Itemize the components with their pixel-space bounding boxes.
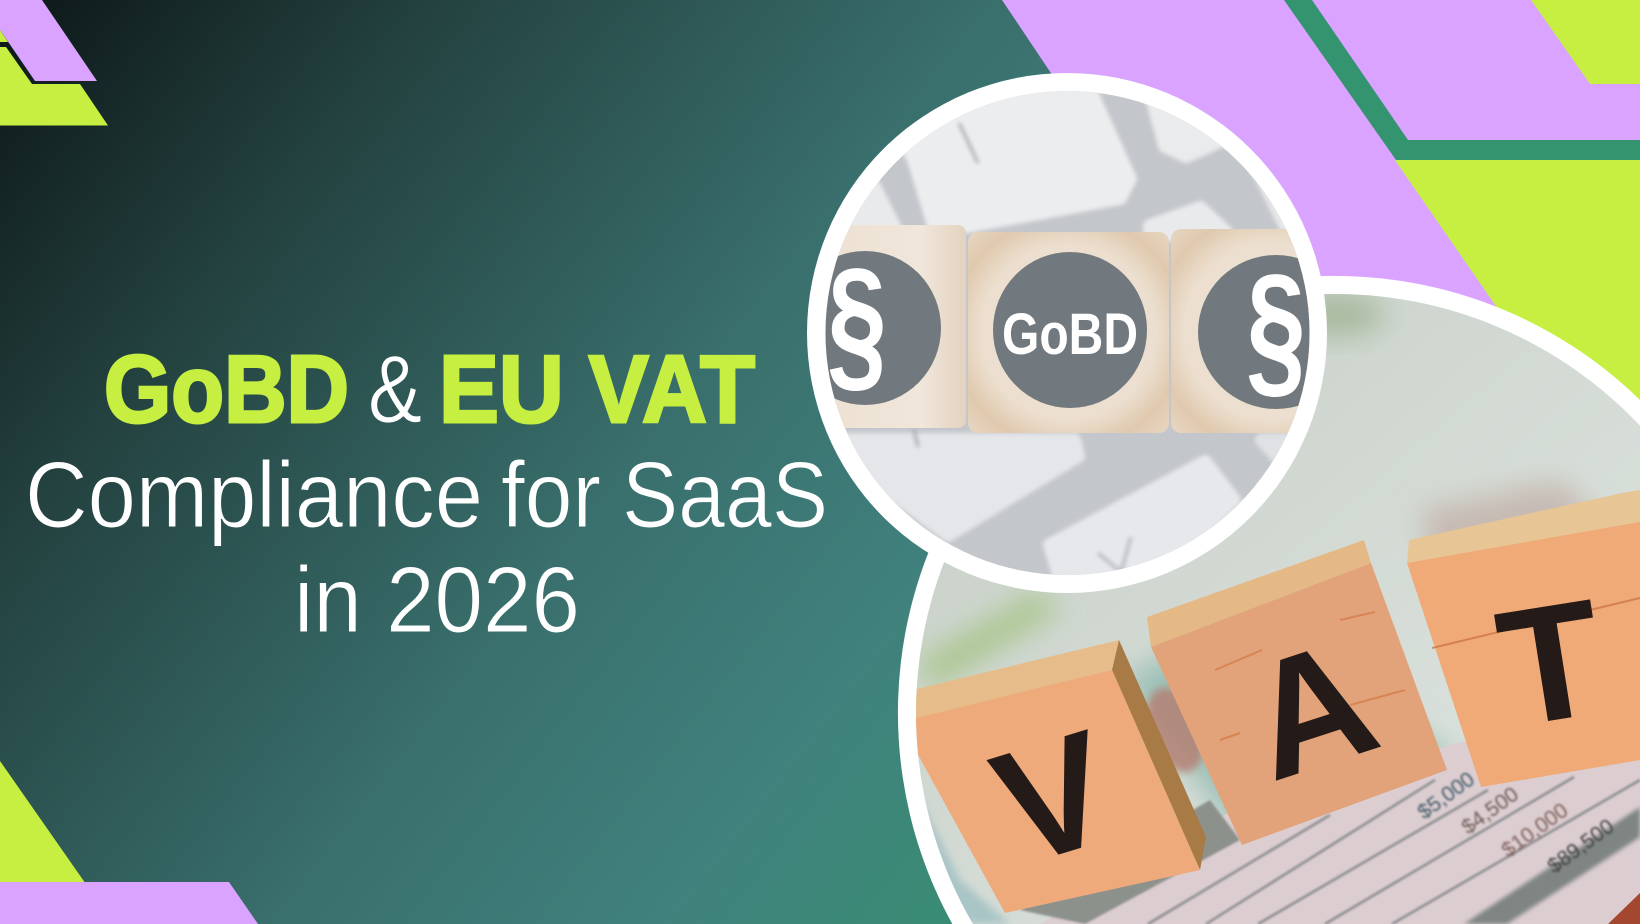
photo: GoBD wooden dice on keyboard [807, 73, 1327, 593]
die: left section sign [826, 225, 966, 428]
heading line 3: in 2026 [294, 547, 580, 652]
tile T: T [1487, 564, 1615, 762]
heading line 1: & [368, 336, 422, 443]
title [25, 336, 828, 652]
die: GoBD [968, 232, 1169, 433]
heading line 1: GoBD [104, 336, 349, 443]
heading line 1: EU VAT [439, 336, 755, 443]
die: right section sign: § [1246, 243, 1306, 413]
decoration: top right shapes [1002, 0, 1640, 620]
tile V [900, 640, 1206, 913]
tile A [1147, 540, 1447, 845]
heading line 2: SaaS [622, 442, 828, 547]
tile T [1407, 490, 1640, 787]
decoration: top left shapes [0, 0, 108, 126]
ledger figures: $89,500 [1543, 815, 1618, 878]
ledger figures: $10,000 [1497, 799, 1572, 862]
keyboard keys [847, 91, 1288, 575]
heading line 1 [104, 336, 755, 443]
tile A: A [1226, 603, 1396, 815]
heading line 2 [25, 442, 828, 547]
photo: VAT wooden tiles [890, 276, 1640, 924]
ledger figures [1416, 771, 1614, 873]
ledger paper [1020, 741, 1640, 924]
die: GoBD: GoBD [1002, 302, 1138, 367]
heading line 2: for [501, 442, 601, 547]
die: left section sign: § [827, 237, 887, 407]
blurred background tones [916, 293, 1600, 924]
die: right section sign [1171, 229, 1310, 433]
ledger figures: $4,500 [1457, 783, 1523, 839]
heading line 2: Compliance [25, 442, 483, 547]
tile V: V [975, 696, 1132, 900]
decoration: bottom left shapes [0, 761, 258, 924]
ledger figures: $5,000 [1413, 768, 1479, 824]
